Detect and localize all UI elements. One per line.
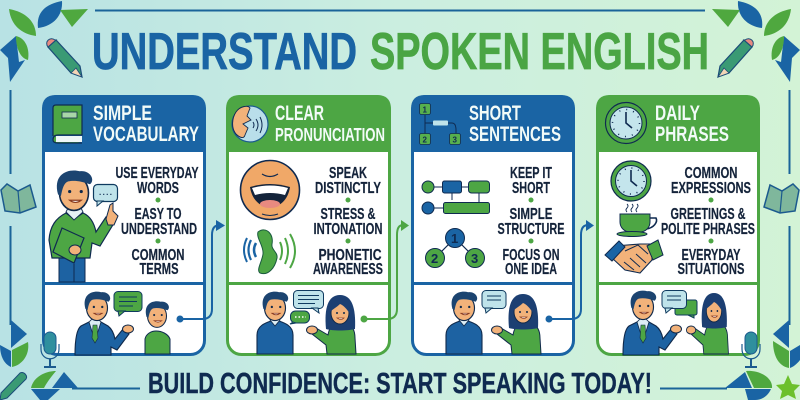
- panel: simple vocabulary: [42, 95, 206, 355]
- bullet list: KEEP IT: [510, 165, 552, 182]
- decoration: bottom right shapes: [725, 320, 800, 400]
- icon: laughing face: [240, 160, 300, 220]
- bullet list: COMMON: [684, 165, 738, 182]
- panel: short sentences: [411, 95, 575, 354]
- heading: SIMPLE: [93, 102, 152, 125]
- speech bubble: ....: [99, 188, 112, 197]
- icon: numbered flow: 2: [422, 136, 428, 144]
- icon: left book: [1, 184, 36, 213]
- panel body: [44, 96, 204, 354]
- heading: SHORT: [469, 102, 521, 125]
- icon: handshake: [605, 240, 663, 273]
- figure: two people talking: [257, 292, 356, 354]
- bullet list: WORDS: [137, 180, 179, 197]
- figure: two colleagues talking: [623, 291, 728, 355]
- bullet list: SIMPLE: [510, 206, 552, 223]
- panel header: [226, 95, 391, 152]
- speech bubbles: [662, 290, 697, 318]
- figure: two people talking: [446, 292, 541, 354]
- bullet list: USE EVERYDAY: [116, 165, 199, 182]
- bullet list: DISTINCTLY: [315, 180, 381, 197]
- bullet list: TERMS: [140, 261, 178, 278]
- green speech bubble: [114, 292, 142, 316]
- bullet list: EXPRESSIONS: [671, 180, 751, 197]
- icon: right book: [764, 184, 799, 213]
- bullet list: SPEAK: [329, 165, 368, 182]
- diagram: numbered tree: 2: [431, 251, 438, 266]
- figure: teacher with child: [75, 292, 170, 355]
- title: [92, 23, 709, 81]
- bullet list: [116, 165, 199, 278]
- icon: top right pencil: [718, 39, 753, 77]
- bullet list: STRESS &: [320, 206, 376, 223]
- icon: speaking mouth: [232, 106, 268, 142]
- panel header: [596, 95, 760, 152]
- bullet list: SHORT: [512, 180, 550, 197]
- panel: daily phrases: [596, 95, 760, 355]
- connector arrow 1: [176, 220, 225, 322]
- icon: numbered flow: [420, 104, 460, 144]
- icon: left microphone: [41, 332, 59, 367]
- bullet list: [498, 165, 564, 278]
- icon: top left pencil: [47, 39, 82, 77]
- icon: green book: [53, 105, 82, 143]
- diagram: numbered tree: 1: [451, 231, 458, 246]
- decoration: bottom left shapes: [0, 320, 78, 400]
- decoration: top right leaves: [712, 1, 800, 82]
- icon: clock: [611, 161, 651, 201]
- bullet list: COMMON: [132, 247, 184, 264]
- connector arrow 3: [546, 220, 594, 322]
- bullet list: POLITE PHRASES: [661, 221, 755, 238]
- panel: daily phrases: PHRASES: [655, 123, 729, 146]
- bullet list: [661, 165, 755, 278]
- panel: simple vocabulary: VOCABULARY: [93, 123, 199, 146]
- speech bubble: [94, 184, 118, 206]
- bullet list: INTONATION: [314, 221, 382, 238]
- speech bubble: [482, 290, 506, 313]
- panel header: [42, 95, 206, 152]
- bullet list: EASY TO: [134, 206, 182, 223]
- diagram: flow boxes: [422, 181, 490, 214]
- heading: CLEAR: [275, 102, 324, 125]
- bullet list: AWARENESS: [313, 261, 383, 278]
- panel body: [412, 96, 574, 354]
- panel: clear pronunciation: PRONUNCIATION: [275, 125, 385, 145]
- title: blue words: UNDERSTAND: [92, 23, 357, 81]
- bullet list: GREETINGS &: [670, 206, 746, 223]
- heading: DAILY: [655, 102, 700, 125]
- figure: teacher pointing: [49, 170, 118, 282]
- diagram: numbered tree: 3: [471, 251, 478, 266]
- decoration: top left leaves: [0, 1, 88, 82]
- panel body: [228, 96, 390, 354]
- speech bubbles: [290, 290, 324, 324]
- panel: clear pronunciation: [226, 95, 391, 354]
- bullet list: EVERYDAY: [682, 247, 741, 264]
- bullet list: FOCUS ON: [502, 247, 560, 264]
- connector arrow 2: [360, 220, 409, 322]
- bullet list: PHONETIC: [318, 247, 382, 264]
- bullet list: [313, 165, 383, 278]
- bullet list: SITUATIONS: [678, 261, 744, 278]
- icon: numbered flow: 1: [422, 106, 428, 114]
- icon: star: [776, 375, 800, 399]
- panel: short sentences: SENTENCES: [469, 123, 561, 146]
- icon: coffee cup: [617, 204, 657, 236]
- diagram: numbered tree: [426, 228, 484, 268]
- panel header: [411, 95, 575, 152]
- icon: sound waves: [244, 230, 295, 274]
- panel body: [598, 96, 758, 354]
- bullet list: STRUCTURE: [498, 221, 564, 238]
- icon: numbered flow: 3: [452, 136, 458, 144]
- bullet list: ONE IDEA: [505, 261, 557, 278]
- icon: header clock: [606, 102, 646, 144]
- icon: right microphone: [742, 332, 760, 367]
- bullet list: UNDERSTAND: [121, 221, 197, 238]
